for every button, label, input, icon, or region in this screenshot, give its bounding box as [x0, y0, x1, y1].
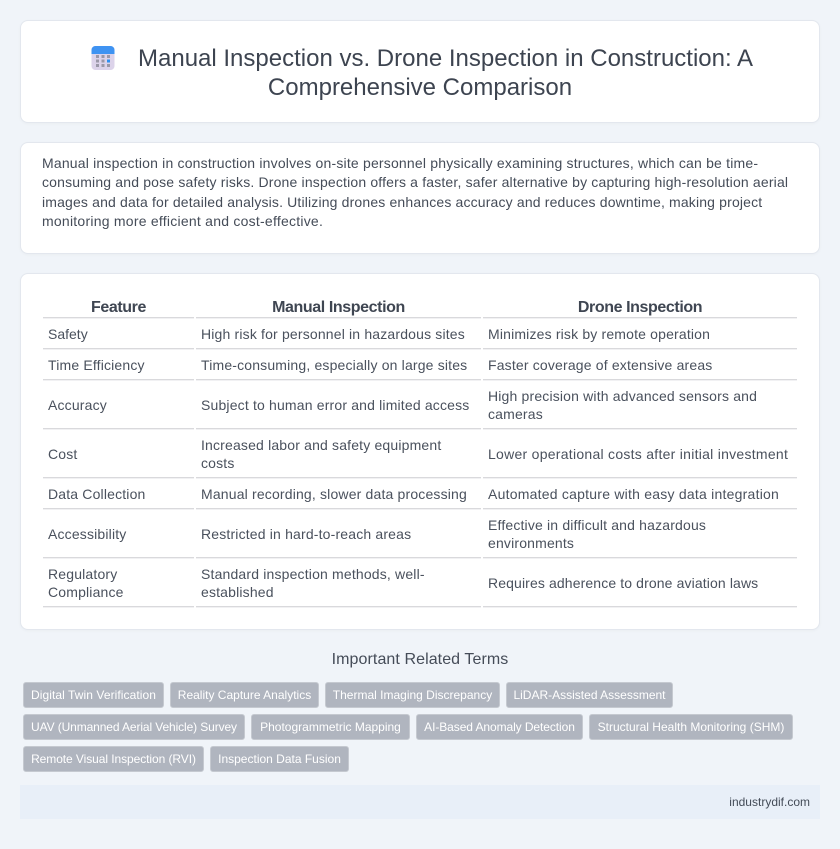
column heading: drone inspection: Drone Inspection [578, 299, 702, 316]
intro text: Manual inspection in construction involves on-site personnel physically examining structures, which can be time- [42, 154, 758, 170]
tags: related terms [23, 682, 793, 772]
row: data collection [48, 486, 779, 502]
row: time efficiency [48, 357, 712, 373]
footer [20, 785, 820, 819]
row: regulatory compliance: Requires adherence to drone aviation laws [488, 575, 758, 591]
header card [20, 20, 820, 123]
row: time efficiency: Time-consuming, especially on large sites [201, 357, 467, 373]
row: cost [48, 437, 788, 471]
tag [589, 714, 793, 740]
tag [23, 714, 245, 740]
intro text [42, 154, 788, 229]
tag [210, 746, 349, 772]
tag [325, 682, 500, 708]
row: safety [48, 326, 710, 342]
heading: important related terms: Important Related Terms [332, 651, 508, 668]
row: safety: High risk for personnel in hazardous sites [201, 326, 465, 342]
row: safety: Safety [48, 326, 88, 342]
panel: comparison table [20, 273, 820, 630]
row: safety: Minimizes risk by remote operation [488, 326, 710, 342]
tag: Photogrammetric Mapping [260, 720, 401, 734]
column heading: feature: Feature [91, 299, 146, 316]
intro text: monitoring more efficient and cost-effective. [42, 213, 323, 229]
column heading: manual inspection: Manual Inspection [272, 299, 405, 316]
tag: Reality Capture Analytics [178, 688, 311, 702]
tag [506, 682, 673, 708]
row: accuracy: High precision with advanced sensors and [488, 388, 757, 404]
tag: Inspection Data Fusion [218, 752, 341, 766]
title [138, 45, 753, 101]
tag: LiDAR-Assisted Assessment [513, 688, 666, 702]
row: accessibility: Accessibility [48, 526, 126, 542]
row: regulatory compliance [48, 566, 758, 600]
tag [251, 714, 410, 740]
tag: Structural Health Monitoring (SHM) [598, 720, 784, 734]
panel: introduction [20, 142, 820, 254]
row: accessibility [48, 517, 706, 551]
row: time efficiency: Time Efficiency [48, 357, 145, 373]
row: cost: Cost [48, 446, 77, 462]
row: data collection: Automated capture with easy data integration [488, 486, 779, 502]
row: cost: costs [201, 455, 235, 471]
icon: calendar [92, 46, 114, 70]
row: regulatory compliance: Standard inspection methods, well- [201, 566, 425, 582]
tag: Digital Twin Verification [31, 688, 156, 702]
row: time efficiency: Faster coverage of extensive areas [488, 357, 712, 373]
footer source text: industrydif.com [729, 795, 810, 809]
title: Comprehensive Comparison [268, 74, 572, 101]
row: accuracy: cameras [488, 406, 543, 422]
row: accuracy: Subject to human error and limited access [201, 397, 469, 413]
tag [23, 746, 204, 772]
tag [23, 682, 164, 708]
row: cost: Lower operational costs after initial investment [488, 446, 788, 462]
row: accessibility: Effective in difficult and hazardous [488, 517, 706, 533]
tag: UAV (Unmanned Aerial Vehicle) Survey [31, 720, 237, 734]
row: cost: Increased labor and safety equipment [201, 437, 441, 453]
tag: AI-Based Anomaly Detection [424, 720, 575, 734]
intro text: consuming and pose safety risks. Drone inspection offers a faster, safer alternative by capturing high-resolution aerial [42, 174, 788, 190]
intro text: images and data for detailed analysis. Utilizing drones enhances accuracy and reduces downtime, making project [42, 194, 762, 210]
row: regulatory compliance: Regulatory [48, 566, 117, 582]
row: accuracy [48, 388, 757, 422]
tag: Thermal Imaging Discrepancy [333, 688, 492, 702]
tag: Remote Visual Inspection (RVI) [31, 752, 196, 766]
row: accuracy: Accuracy [48, 397, 107, 413]
row: regulatory compliance: Compliance [48, 584, 124, 600]
title: Manual Inspection vs. Drone Inspection in Construction: A [138, 45, 753, 72]
tag [416, 714, 583, 740]
row: accessibility: Restricted in hard-to-reach areas [201, 526, 411, 542]
tag [170, 682, 319, 708]
row: data collection: Manual recording, slower data processing [201, 486, 467, 502]
row: regulatory compliance: established [201, 584, 274, 600]
row: data collection: Data Collection [48, 486, 146, 502]
row: accessibility: environments [488, 535, 574, 551]
